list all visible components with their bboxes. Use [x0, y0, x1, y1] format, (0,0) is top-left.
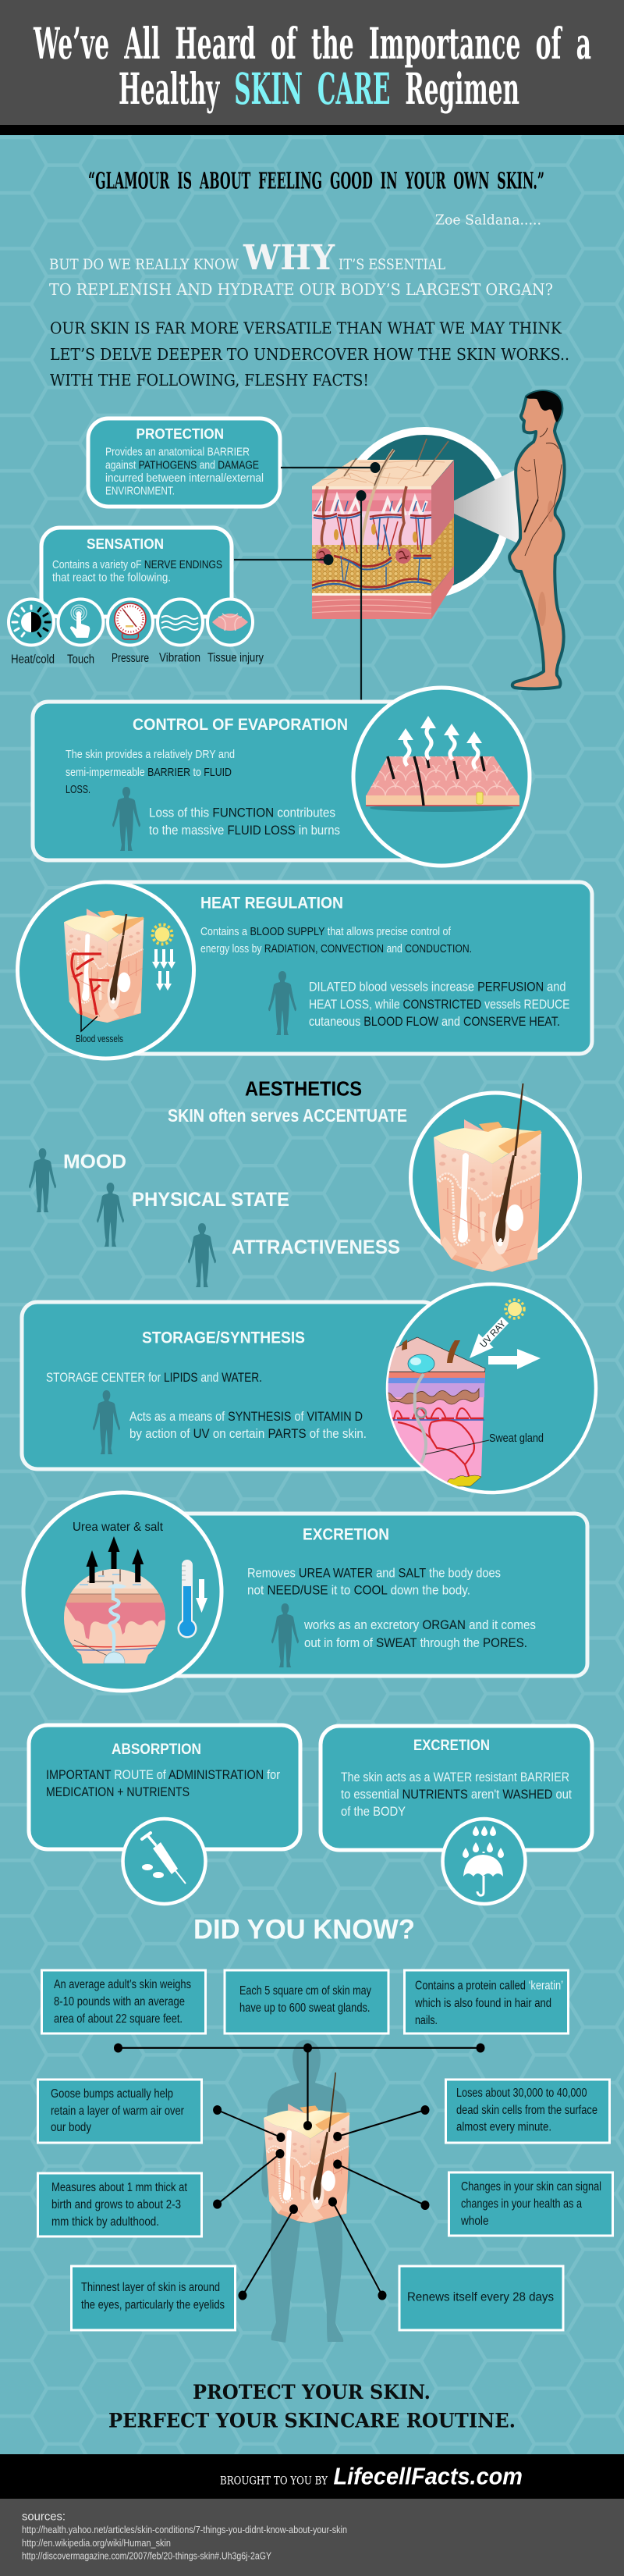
fact box: eyelids	[72, 2266, 236, 2330]
label: blood vessels: Blood vessels	[76, 1033, 123, 1044]
icon: hair strand	[328, 2073, 336, 2132]
icon: magnifier circle behind skin cube	[342, 431, 506, 595]
fact box: goose bumps: Goose bumps actually help	[51, 2087, 173, 2101]
icon: tissue injury	[207, 600, 253, 645]
sensation labels	[11, 651, 264, 667]
connectors: fact lines	[114, 2044, 485, 2300]
text: dilated vessels	[309, 979, 569, 1029]
fact box: keratin: Contains a protein called ‘keratin’	[415, 1980, 563, 1992]
panel: excretion barrier	[321, 1726, 592, 1904]
fact box: dead skin cells: almost every minute.	[456, 2120, 551, 2134]
fact box: sweat glands: have up to 600 sweat glands.	[239, 2001, 370, 2015]
icon: UV ray arrow	[462, 1313, 512, 1365]
text: water resistant barrier: of the BODY	[341, 1804, 406, 1819]
sources: sources:	[22, 2510, 66, 2523]
sensation labels: Heat/cold	[11, 653, 55, 667]
heading: absorption: ABSORPTION	[112, 1742, 201, 1758]
text: water resistant barrier	[341, 1770, 572, 1819]
text: dilated vessels: DILATED blood vessels increase PERFUSION and	[309, 979, 566, 994]
text: removes urea: not NEED/USE it to COOL down the body.	[247, 1583, 470, 1597]
heading: excretion: EXCRETION	[413, 1738, 490, 1754]
subheading: SKIN often serves ACCENTUATE	[168, 1105, 407, 1126]
text: sensation description: Contains a variety oF NERVE ENDINGS	[52, 558, 222, 571]
text: dilated vessels: HEAT LOSS, while CONSTRICTED vessels REDUCE	[309, 997, 569, 1012]
sources: http://health.yahoo.net/articles/skin-conditions/7-things-you-didnt-know-about-your-skin	[22, 2524, 347, 2535]
text: blood supply: Contains a BLOOD SUPPLY that allows precise control of	[200, 925, 452, 938]
icon: person	[29, 1148, 56, 1212]
fact box: sweat glands	[225, 1970, 388, 2033]
intro statement: WITH THE FOLLOWING, FLESHY FACTS!	[50, 371, 369, 390]
icon: UV ray arrow: UV RAY	[477, 1318, 508, 1350]
icon: person	[188, 1223, 216, 1287]
icon: up arrows	[86, 1536, 144, 1583]
text: blood supply	[200, 925, 472, 955]
intro statement: LET’S DELVE DEEPER TO UNDERCOVER HOW THE SKIN WORKS..	[50, 345, 569, 364]
panel: excretion	[140, 1514, 587, 1676]
text: protection description: Provides an anatomical BARRIER	[105, 445, 250, 459]
fact box: keratin: nails.	[415, 2014, 438, 2027]
fact box: weight: area of about 22 square feet.	[54, 2012, 183, 2026]
label: mood: MOOD	[63, 1151, 126, 1172]
panel: control of evaporation	[33, 702, 438, 860]
text: vitamin d: Acts as a means of SYNTHESIS of VITAMIN D	[129, 1409, 363, 1424]
intro question: TO REPLENISH AND HYDRATE OUR BODY’S LARGEST ORGAN?	[49, 280, 553, 299]
intro question: IT’S ESSENTIAL	[339, 256, 445, 273]
footer: brought to you by: LifecellFacts.com	[334, 2462, 523, 2490]
fact box: renews	[399, 2266, 563, 2330]
connector lines from panels to skin cube	[234, 462, 381, 700]
footer: brought to you by	[0, 2454, 624, 2499]
icon: vibration waves	[158, 600, 203, 645]
sensation labels: Pressure	[112, 652, 149, 665]
text: fluid loss: to the massive FLUID LOSS in burns	[149, 823, 340, 838]
fact box: sweat glands: Each 5 square cm of skin may	[239, 1984, 371, 1998]
icon: person	[268, 971, 296, 1035]
fact box: renews: Renews itself every 28 days	[407, 2290, 554, 2304]
intro question: WHY	[243, 238, 335, 278]
fact box: keratin	[404, 1970, 568, 2033]
intro statement	[50, 318, 569, 390]
icon: person	[97, 1183, 124, 1247]
sources: http://discovermagazine.com/2007/feb/20-things-skin#.Uh3g6j-2aGY	[22, 2551, 272, 2562]
text: protection description: incurred between internal/external	[105, 471, 264, 485]
intro question	[49, 238, 553, 299]
text: removes urea: Removes UREA WATER and SALT the body does	[247, 1566, 501, 1580]
fact box: eyelids: the eyes, particularly the eyelids	[81, 2298, 225, 2312]
text: water resistant barrier: The skin acts as a WATER resistant BARRIER	[341, 1770, 569, 1784]
heading: excretion: EXCRETION	[303, 1525, 389, 1544]
text: fluid loss: Loss of this FUNCTION contributes	[149, 806, 335, 820]
closing message	[108, 2381, 516, 2432]
fact box: health signal: changes in your health as a	[461, 2197, 582, 2211]
text: vitamin d	[129, 1409, 367, 1441]
fact box: goose bumps: retain a layer of warm air over	[51, 2105, 184, 2118]
icon: white arrow	[488, 1349, 541, 1369]
fact box: dead skin cells	[446, 2080, 610, 2143]
section: aesthetics	[29, 1077, 407, 1287]
intro statement: OUR SKIN IS FAR MORE VERSATILE THAN WHAT WE MAY THINK	[50, 318, 562, 337]
panel: storage synthesis	[22, 1302, 438, 1469]
footer: brought to you by: BROUGHT TO YOU BY	[220, 2475, 328, 2487]
text: protection description	[105, 445, 264, 498]
circle: UV and sweat gland illustration	[382, 1284, 596, 1493]
heading: did you know: DID YOU KNOW?	[193, 1914, 415, 1945]
sources	[0, 2499, 624, 2576]
circle: heat regulation illustration	[17, 882, 193, 1059]
fact box: goose bumps: our body	[51, 2121, 91, 2134]
icon: down arrow	[196, 1579, 207, 1613]
icon: touch	[58, 600, 103, 645]
text: storage center: STORAGE CENTER for LIPIDS and WATER.	[46, 1370, 262, 1385]
icon: skin block	[264, 2104, 350, 2223]
icon: thermometer	[178, 1560, 197, 1638]
heading: heat regulation: HEAT REGULATION	[200, 895, 343, 912]
sensation labels: Touch	[67, 653, 94, 667]
text: excretory organ: works as an excretory ORGAN and it comes	[303, 1617, 536, 1632]
fact box: eyelids: Thinnest layer of skin is around	[81, 2281, 220, 2294]
label: sweat gland	[425, 1432, 544, 1454]
text: protection description: ENVIRONMENT.	[105, 484, 175, 498]
panel: sensation	[41, 528, 232, 617]
circle: evaporation illustration	[353, 688, 530, 866]
fact box: thickness: birth and grows to about 2-3	[51, 2198, 181, 2211]
heading: aesthetics: AESTHETICS	[245, 1077, 362, 1101]
fact box: health signal: whole	[460, 2215, 488, 2228]
text: barrier: LOSS.	[66, 783, 90, 796]
heading: storage synthesis: STORAGE/SYNTHESIS	[142, 1329, 305, 1347]
text: barrier	[66, 748, 235, 796]
label: physical state: PHYSICAL STATE	[132, 1189, 289, 1211]
icon: person	[112, 787, 140, 851]
icon: standing man	[509, 391, 565, 690]
heading: protection: PROTECTION	[136, 426, 224, 442]
text: route of administration: IMPORTANT ROUTE of ADMINISTRATION for	[46, 1767, 280, 1782]
text: route of administration: MEDICATION + NUTRIENTS	[46, 1784, 190, 1799]
closing message: PERFECT YOUR SKINCARE ROUTINE.	[108, 2409, 516, 2432]
fact box: weight: An average adult’s skin weighs	[54, 1978, 191, 1991]
intro question: BUT DO WE REALLY KNOW	[49, 256, 239, 273]
fact box: keratin: which is also found in hair and	[414, 1997, 551, 2010]
sensation labels: Tissue injury	[207, 651, 264, 665]
fact box: dead skin cells: dead skin cells from the surface	[456, 2104, 597, 2117]
heading: sensation: SENSATION	[87, 536, 164, 552]
panel: heat regulation	[94, 882, 592, 1054]
sensation labels: Vibration	[159, 651, 200, 665]
fact box: thickness: Measures about 1 mm thick at	[51, 2181, 188, 2194]
circle: aesthetics skin illustration	[410, 1083, 580, 1272]
text: sensation description	[52, 558, 222, 584]
fact box: thickness	[37, 2173, 201, 2236]
icon: syringe and pills	[123, 1819, 206, 1904]
icon: body silhouette	[261, 2040, 350, 2343]
text: excretory organ	[303, 1617, 536, 1650]
fact box: weight: 8-10 pounds with an average	[54, 1995, 185, 2008]
icon: zoom cone from body	[441, 468, 521, 545]
icon: heat and cold	[9, 600, 54, 645]
fact box: health signal	[449, 2172, 613, 2236]
text: water resistant barrier: to essential NUTRIENTS aren't WASHED out	[341, 1787, 572, 1802]
text: blood supply: energy loss by RADIATION, CONVECTION and CONDUCTION.	[200, 942, 472, 955]
text: route of administration	[46, 1767, 280, 1799]
circle: sweat illustration	[23, 1493, 222, 1691]
sources: http://en.wikipedia.org/wiki/Human_skin	[22, 2538, 171, 2549]
text: vitamin d: by action of UV on certain PARTS of the skin.	[129, 1426, 367, 1441]
text: barrier: The skin provides a relatively DRY and	[66, 748, 235, 761]
icon: skin cross-section cube	[312, 439, 454, 619]
label: attractiveness: ATTRACTIVENESS	[232, 1236, 400, 1258]
icon: pressure gauge	[108, 600, 153, 645]
icon: umbrella and rain	[443, 1819, 526, 1904]
closing message: PROTECT YOUR SKIN.	[193, 2381, 431, 2404]
text: excretory organ: out in form of SWEAT through the PORES.	[304, 1635, 527, 1650]
text: sensation description: that react to the following.	[52, 571, 171, 584]
icon: person	[271, 1603, 299, 1667]
text: fluid loss	[149, 806, 340, 838]
text: protection description: against PATHOGENS and DAMAGE	[105, 459, 259, 471]
heading: control of evaporation: CONTROL OF EVAPORATION	[133, 716, 348, 734]
text: removes urea	[247, 1566, 501, 1597]
fact box: thickness: mm thick by adulthood.	[51, 2215, 159, 2229]
fact box: dead skin cells: Loses about 30,000 to 40,000	[456, 2087, 587, 2100]
panel: absorption	[29, 1725, 300, 1904]
panel: protection	[88, 418, 280, 507]
label: sweat gland: Sweat gland	[489, 1432, 544, 1445]
title banner: Healthy SKIN CARE Regimen	[119, 63, 519, 114]
icon: person	[93, 1390, 120, 1454]
text: dilated vessels: cutaneous BLOOD FLOW and CONSERVE HEAT.	[309, 1014, 560, 1029]
fact box: goose bumps	[37, 2080, 201, 2143]
fact box: weight	[42, 1970, 206, 2033]
label: urea water and salt: Urea water & salt	[73, 1521, 164, 1534]
title banner	[0, 0, 624, 135]
quote attribution: Zoe Saldana.....	[435, 212, 541, 228]
text: barrier: semi-impermeable BARRIER to FLUID	[66, 766, 232, 779]
